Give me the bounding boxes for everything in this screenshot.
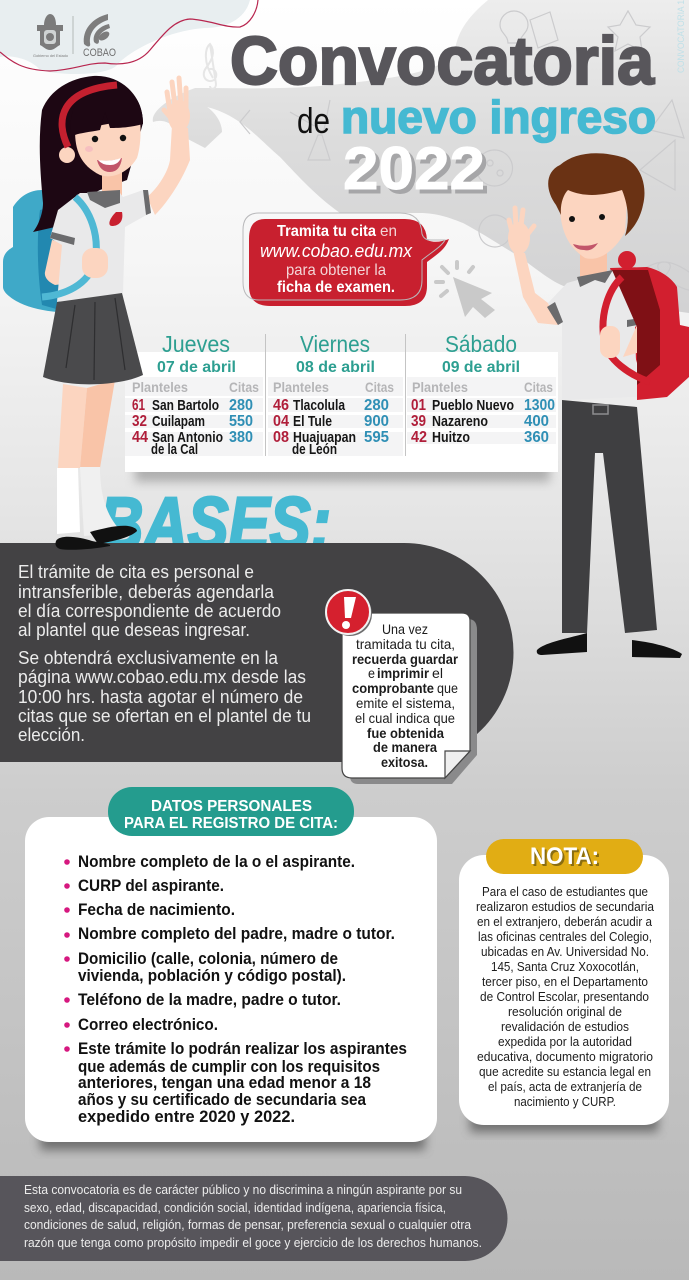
column: Sábado: 01 <box>411 397 426 414</box>
column: Viernes <box>273 331 394 458</box>
column: Sábado: Sábado <box>445 331 517 357</box>
heading pill: nota <box>486 839 643 874</box>
text: nota body: en el extranjero, deberán acudir a <box>477 915 652 929</box>
column: Jueves <box>132 331 259 458</box>
icon: treble clef doodle <box>204 44 216 89</box>
column: Sábado: Planteles <box>412 379 468 395</box>
column: Sábado: 400 <box>524 413 549 430</box>
text: nota body: Para el caso de estudiantes que <box>482 885 648 899</box>
column: Jueves: San Antonio <box>152 429 223 446</box>
callout: tramita tu cita: Tramita tu cita <box>277 223 376 240</box>
text: nota body: ubicadas en Av. Universidad No. <box>481 945 649 959</box>
bullet list: vivienda, población y código postal). <box>78 966 346 985</box>
text: nota body: educativa, documento migratorio <box>477 1050 653 1064</box>
text: nota body: tercer piso, en el Departamento <box>482 975 648 989</box>
logo: Gobierno del Estado: Gobierno del Estado <box>33 53 69 58</box>
panel: datos personales <box>25 787 437 1150</box>
text: nota body: el país, acta de extranjería de <box>488 1080 642 1094</box>
text: nota body <box>476 885 654 1109</box>
column: Viernes: Planteles <box>273 379 329 395</box>
column: Jueves: San Bartolo <box>152 397 219 414</box>
column: Viernes: 595 <box>364 429 389 446</box>
bullet list: Nombre completo de la o el aspirante. <box>78 852 355 871</box>
column: Jueves: Citas <box>229 379 259 395</box>
heading: BASES: BASES: <box>99 482 331 565</box>
panel: nota <box>459 839 669 1132</box>
callout note: comprobante: de manera <box>373 739 437 755</box>
logo: COBAO: COBAO <box>83 47 116 59</box>
callout: tramita tu cita: ficha de examen. <box>277 279 395 296</box>
bullet list: que además de cumplir con los requisitos <box>78 1057 380 1076</box>
text: nota body: realizaron estudios de secundaria <box>476 900 654 914</box>
footer: aviso de no discriminación: sexo, edad, discapacidad, condición social, identidad indígena, apariencia física, <box>24 1201 446 1215</box>
column: Sábado: 42 <box>411 429 427 446</box>
bullet list: expedido entre 2020 y 2022. <box>78 1107 295 1126</box>
text: obtención de cita: 10:00 hrs. hasta agotar el número de <box>18 686 303 707</box>
column: Jueves: 550 <box>229 413 253 430</box>
icon: exclamation alert <box>326 590 372 636</box>
text: obtención de cita: página www.cobao.edu.mx desde las <box>18 666 306 687</box>
bullet list: Este trámite lo podrán realizar los aspirantes <box>78 1039 407 1058</box>
callout note: comprobante <box>342 613 477 784</box>
bullet list: Nombre completo del padre, madre o tutor. <box>78 924 395 943</box>
column: Sábado: Pueblo Nuevo <box>432 397 514 414</box>
column: Viernes: 46 <box>273 397 289 414</box>
callout note: comprobante: imprimir <box>377 665 430 681</box>
column: Sábado: 39 <box>411 413 426 430</box>
subtitle: de nuevo ingreso: nuevo ingreso <box>341 91 656 143</box>
text: trámite de cita: al plantel que deseas ingresar. <box>18 619 250 640</box>
panel: bases <box>0 543 514 762</box>
column: Jueves: Cuilapam <box>152 413 205 430</box>
callout note: comprobante: comprobante <box>352 680 434 696</box>
text: nota body: expedida por la autoridad <box>498 1035 632 1049</box>
text: nota body: las oficinas centrales del Colegio, <box>478 930 652 944</box>
icon: cursor click <box>436 262 495 318</box>
column: Jueves: 280 <box>229 397 253 414</box>
year 2022: 2022 <box>343 135 485 202</box>
column: Sábado: 1300 <box>524 397 555 414</box>
column: Jueves: de la Cal <box>151 441 198 458</box>
column: Sábado: Citas <box>524 379 553 395</box>
column: Viernes: Tlacolula <box>293 397 346 414</box>
callout note: comprobante: emite el sistema, <box>356 695 455 711</box>
text: trámite de cita: El trámite de cita es personal e <box>18 561 254 582</box>
text: nota body: revalidación de estudios <box>501 1020 629 1034</box>
callout note: comprobante: fue obtenida <box>367 725 444 741</box>
column: Viernes: 08 <box>273 429 289 446</box>
heading pill: datos personales <box>108 787 354 836</box>
footer: aviso de no discriminación: razón que tenga como propósito impedir el goce y ejercicio de los derechos humanos. <box>24 1236 482 1250</box>
illustration: student boy <box>508 153 689 658</box>
bullet list: Teléfono de la madre, padre o tutor. <box>78 990 341 1009</box>
callout note: comprobante: recuerda guardar <box>352 651 458 667</box>
text: nota body: que acredite su estancia legal en <box>479 1065 651 1079</box>
text: nota body: de Control Escolar, presentando <box>480 990 649 1004</box>
bullet list <box>64 852 407 1126</box>
callout note: comprobante: el <box>432 665 443 681</box>
text: trámite de cita <box>18 561 281 640</box>
column: Viernes: 280 <box>364 397 389 414</box>
column: Sábado <box>411 331 555 446</box>
column: Jueves: Jueves <box>162 331 230 357</box>
text: obtención de cita: citas que se ofertan en el plantel de tu <box>18 705 311 726</box>
schedule table <box>125 331 558 482</box>
callout: tramita tu cita: en <box>380 223 397 240</box>
bullet list: CURP del aspirante. <box>78 876 224 895</box>
column: Viernes: 04 <box>273 413 289 430</box>
logo: Gobierno del Estado <box>33 14 69 58</box>
heading pill: datos personales: DATOS PERSONALES <box>151 798 312 815</box>
column: Jueves: Planteles <box>132 379 188 395</box>
column: Sábado: 09 de abril <box>442 359 520 376</box>
subtitle: de nuevo ingreso: de <box>297 100 330 141</box>
column: Jueves: 61 <box>132 397 145 414</box>
callout note: comprobante: exitosa. <box>381 754 428 770</box>
top-left light band with wavy line <box>0 0 258 74</box>
title: Convocatoria: Convocatoria <box>230 23 655 99</box>
bullet list: Correo electrónico. <box>78 1015 218 1034</box>
callout note: comprobante: tramitada tu cita, <box>356 636 455 652</box>
text: nota body: nacimiento y CURP. <box>514 1095 616 1109</box>
column: Sábado: 360 <box>524 429 549 446</box>
callout: tramita tu cita: para obtener la <box>286 262 386 279</box>
bullet list: anteriores, tengan una edad menor a 18 <box>78 1073 371 1092</box>
column: Viernes: Viernes <box>300 331 370 357</box>
logo: COBAO <box>72 14 116 59</box>
column: Viernes: 900 <box>364 413 389 430</box>
heading pill: datos personales: PARA EL REGISTRO DE CITA: <box>124 815 338 832</box>
text: obtención de cita <box>18 647 311 745</box>
text: trámite de cita: intransferible, deberás agendarla <box>18 581 275 602</box>
bullet list: Domicilio (calle, colonia, número de <box>78 949 338 968</box>
column: Sábado: Nazareno <box>432 413 488 430</box>
callout: tramita tu cita <box>243 213 449 306</box>
column: Jueves: 380 <box>229 429 253 446</box>
text: obtención de cita: Se obtendrá exclusivamente en la <box>18 647 279 668</box>
raised hand <box>164 78 190 132</box>
callout note: comprobante: Una vez <box>382 621 428 637</box>
callout: tramita tu cita: www.cobao.edu.mx <box>260 241 413 261</box>
heading pill: nota: NOTA: <box>530 843 599 870</box>
footer: aviso de no discriminación: Esta convocatoria es de carácter público y no discrimina a ningún aspirante por su <box>24 1183 462 1197</box>
grey doodle blob background <box>153 0 689 313</box>
illustration: student girl <box>3 76 190 550</box>
bullet list: años y su certificado de secundaria sea <box>78 1090 366 1109</box>
column: Sábado: Huitzo <box>432 429 470 446</box>
table row bands <box>125 377 556 456</box>
footer: aviso de no discriminación: condiciones de salud, religión, formas de pensar, preferencia sexual o cualquier otra <box>24 1218 471 1232</box>
heading pill: nota: NOTA: <box>532 845 601 872</box>
column: Viernes: 08 de abril <box>296 359 375 376</box>
column: Viernes: Huajuapan <box>293 429 356 446</box>
text: nota body: 145, Santa Cruz Xoxocotlán, <box>491 960 639 974</box>
column: Viernes: El Tule <box>293 413 332 430</box>
callout note: comprobante: que <box>437 680 458 696</box>
column: Jueves: 07 de abril <box>157 359 236 376</box>
waving hand <box>508 208 534 254</box>
callout note: comprobante: e <box>368 665 375 681</box>
text: trámite de cita: el día correspondiente de acuerdo <box>18 600 281 621</box>
column: Viernes: Citas <box>365 379 394 395</box>
bullet list: Fecha de nacimiento. <box>78 900 235 919</box>
callout note: comprobante: el cual indica que <box>355 710 455 726</box>
column: Jueves: 32 <box>132 413 147 430</box>
text: obtención de cita: elección. <box>18 724 85 745</box>
text: nota body: resolución original de <box>508 1005 622 1019</box>
column: Jueves: 44 <box>132 429 148 446</box>
column: Viernes: de León <box>292 441 337 458</box>
year 2022: 2022 <box>347 139 489 206</box>
footer: aviso de no discriminación <box>0 1176 508 1261</box>
